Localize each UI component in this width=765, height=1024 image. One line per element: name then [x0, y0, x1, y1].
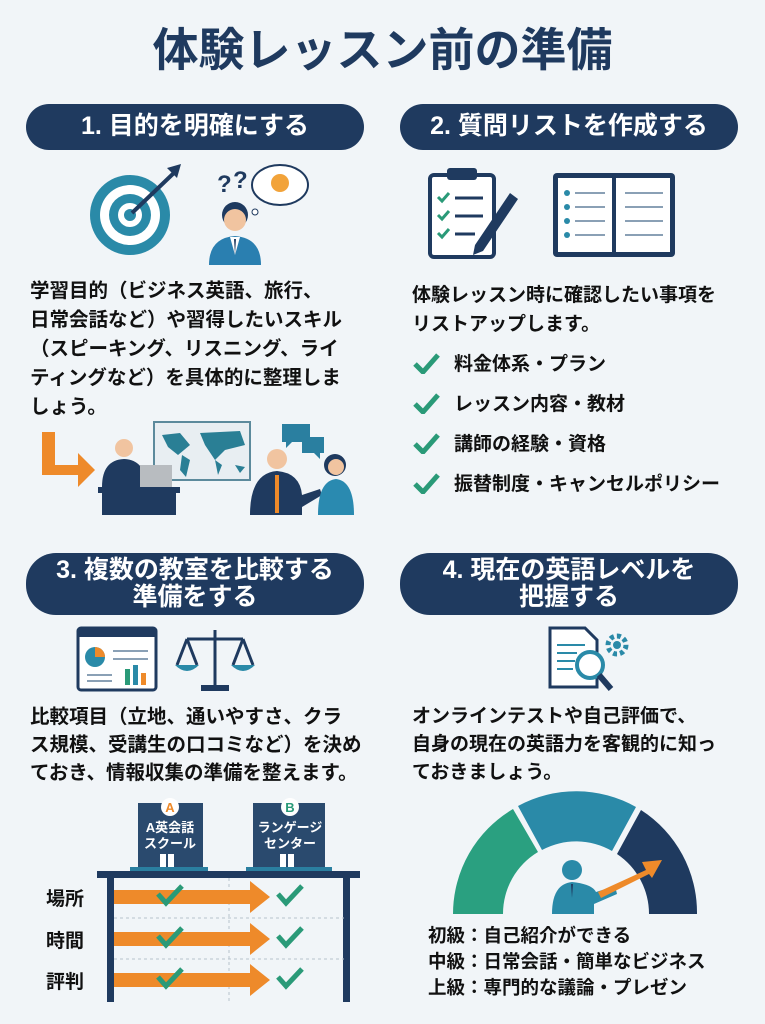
illustration: business scene: [42, 421, 354, 515]
checklist: [413, 353, 720, 495]
text: panel 2: 体験レッスン時に確認したい事項を: [412, 285, 716, 306]
check item 4: 振替制度・キャンセルポリシー: [454, 474, 720, 495]
text: panel 3: ておき、情報収集の準備を整えます。: [30, 762, 358, 784]
text: panel 2: リストアップします。: [412, 314, 600, 335]
icon: chart and scale: [76, 626, 255, 692]
panel: 1 heading: [26, 104, 364, 150]
panel: 1 heading: 1. 目的を明確にする: [81, 112, 309, 140]
panel: 4 heading: 4. 現在の英語レベルを: [443, 556, 695, 584]
comparison table: センター: [264, 836, 316, 851]
text: panel 3: ス規模、受講生の口コミなど）を決め: [30, 734, 362, 756]
text: panel 4: ておきましょう。: [412, 762, 562, 783]
comparison table: スクール: [144, 836, 196, 851]
text: panel 1: 学習目的（ビジネス英語、旅行、: [30, 280, 323, 302]
title: 体験レッスン前の準備: [152, 24, 612, 76]
level list: 上級：専門的な議論・プレゼン: [428, 977, 687, 998]
comparison table: [46, 798, 360, 1002]
comparison table: 場所: [46, 888, 84, 910]
text: panel 1: （スピーキング、リスニング、ライ: [30, 338, 339, 360]
comparison table: A: [165, 800, 175, 815]
panel: 2 heading: 2. 質問リストを作成する: [430, 112, 708, 140]
panel: 4 heading: 把握する: [519, 583, 619, 611]
comparison table: 評判: [46, 971, 84, 993]
panel: 3 heading: 準備をする: [132, 583, 258, 611]
text: panel 4: [412, 706, 716, 783]
check item 3: 講師の経験・資格: [454, 434, 606, 455]
panel: 3 heading: [26, 553, 364, 615]
icon: target and thinking man: ?: [233, 167, 248, 194]
text: panel 1: 日常会話など）や習得したいスキル: [30, 309, 342, 331]
panel: 3 heading: 3. 複数の教室を比較する: [56, 556, 334, 584]
text: panel 1: ティングなど）を具体的に整理しま: [30, 367, 341, 389]
icon: clipboard and notebook: [428, 168, 675, 259]
gauge: [453, 791, 697, 914]
check item 2: レッスン内容・教材: [454, 394, 625, 415]
text: panel 3: 比較項目（立地、通いやすさ、クラ: [30, 706, 342, 728]
text: panel 2: [412, 284, 716, 335]
text: panel 4: 自身の現在の英語力を客観的に知っ: [412, 734, 716, 755]
comparison table: ランゲージ: [258, 820, 322, 835]
text: panel 1: しょう。: [30, 396, 107, 418]
comparison table: 時間: [46, 930, 84, 952]
text: panel 3: [30, 706, 362, 784]
level list: 初級：自己紹介ができる: [428, 925, 631, 946]
text: panel 1: [30, 280, 342, 418]
icon: document magnifier gear: [548, 626, 628, 691]
icon: target and thinking man: ?: [217, 171, 232, 198]
comparison table: A英会話: [146, 820, 194, 835]
panel: 2 heading: [400, 104, 738, 150]
comparison table: B: [285, 800, 295, 815]
check item 1: 料金体系・プラン: [454, 354, 606, 375]
level list: [428, 925, 706, 998]
level list: 中級：日常会話・簡単なビジネス: [428, 951, 706, 972]
icon: target and thinking man: [90, 164, 309, 265]
text: panel 4: オンラインテストや自己評価で、: [412, 706, 696, 727]
panel: 4 heading: [400, 553, 738, 615]
